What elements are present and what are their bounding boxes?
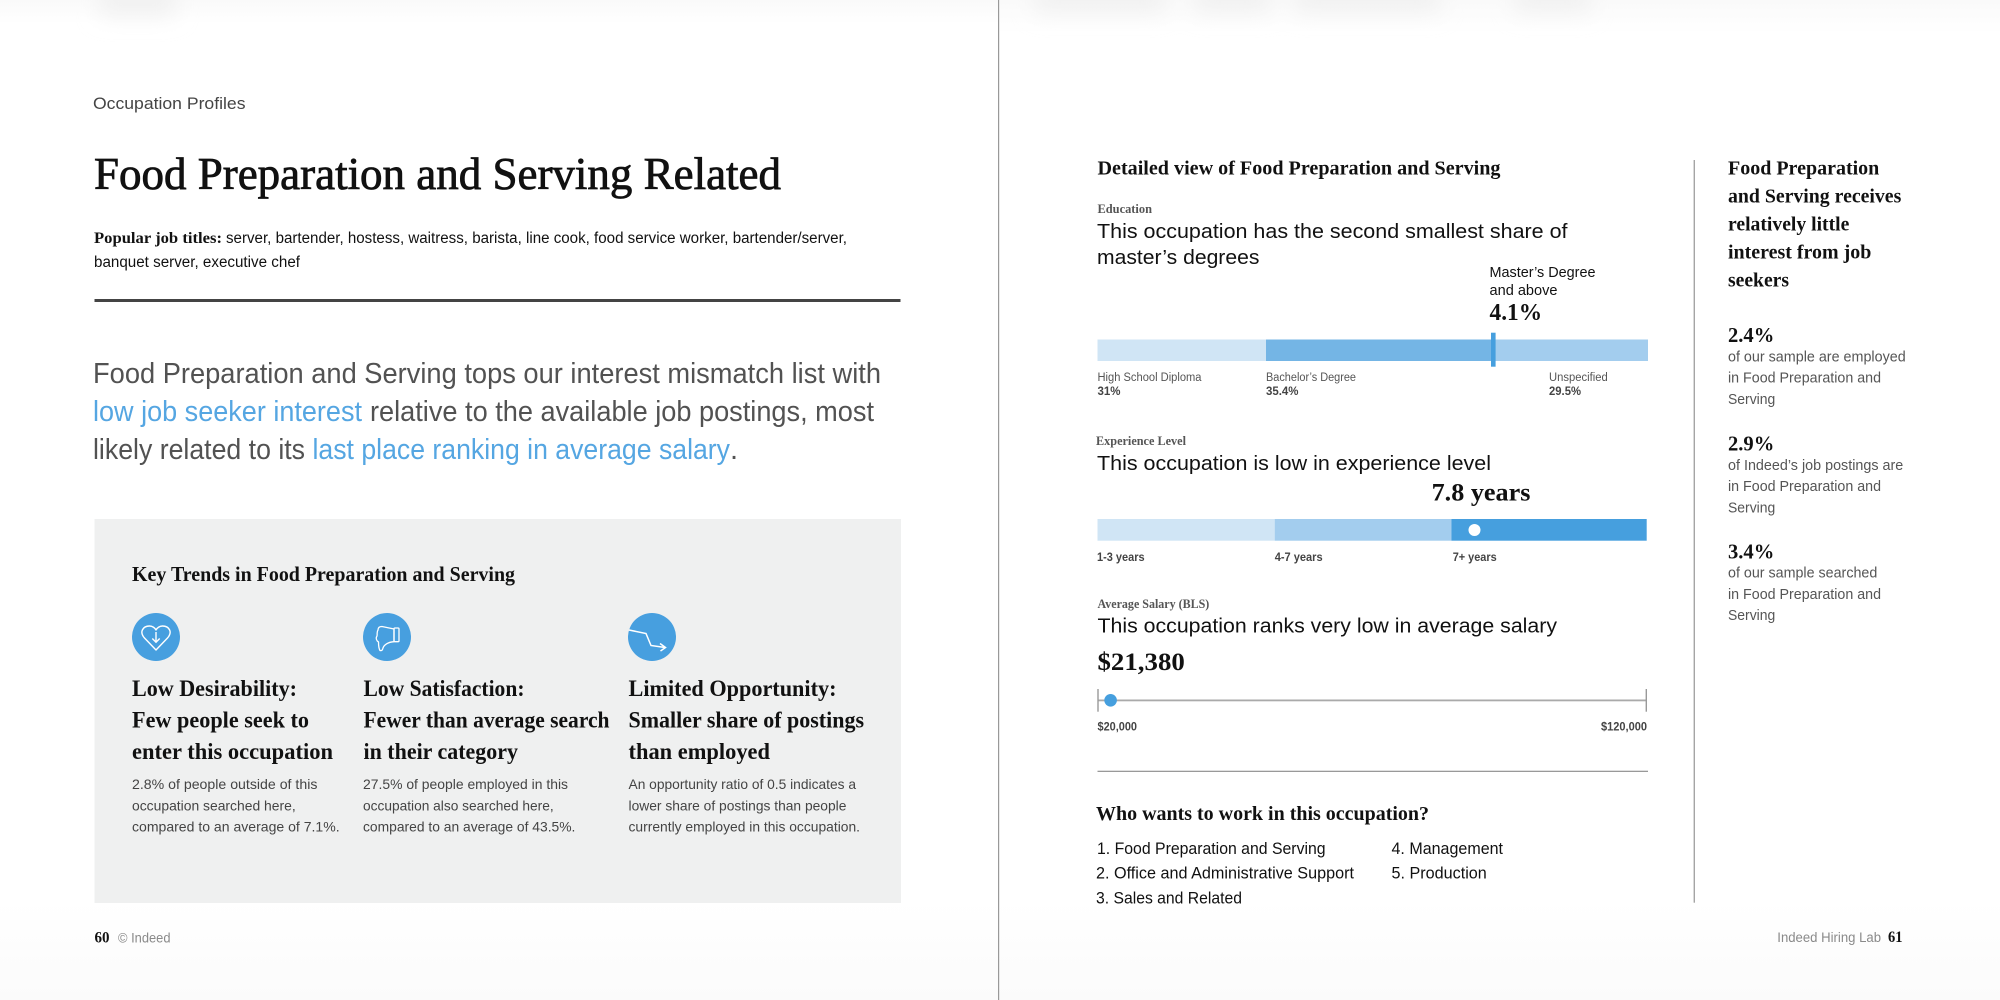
stat: 3.4% searched bbox=[1728, 539, 1881, 624]
stat: 3.4% searched: of our sample searched bbox=[1728, 566, 1877, 582]
heading: detailed view: Detailed view of Food Preparation and Serving bbox=[1098, 158, 1500, 180]
trend: low satisfaction: occupation also searched here, bbox=[363, 798, 554, 814]
trend: limited opportunity: Smaller share of postings bbox=[628, 708, 864, 734]
footer left bbox=[94, 930, 170, 946]
trend: low satisfaction: 27.5% of people employed in this bbox=[363, 776, 568, 792]
stat: 2.4% employed: 2.4% bbox=[1728, 323, 1774, 347]
experience bar labels: 1-3 years bbox=[1097, 552, 1145, 564]
education label: Education bbox=[1098, 201, 1153, 216]
stat: 2.9% job postings: 2.9% bbox=[1728, 432, 1774, 456]
stat: 3.4% searched: in Food Preparation and bbox=[1728, 587, 1881, 603]
callout: master's degree 4.1%: and above bbox=[1490, 282, 1558, 299]
trend: low desirability: enter this occupation bbox=[132, 739, 333, 765]
intro statement: relative to the available job postings, most bbox=[370, 396, 874, 428]
salary statement: This occupation ranks very low in average salary bbox=[1098, 615, 1558, 638]
trend: low desirability: 2.8% of people outside of this bbox=[132, 776, 317, 792]
education bar labels: 35.4% bbox=[1266, 386, 1298, 398]
education bar labels bbox=[1098, 372, 1608, 398]
trend: low desirability: compared to an average of 7.1%. bbox=[132, 818, 340, 834]
education bar labels: Bachelor’s Degree bbox=[1266, 372, 1356, 384]
intro statement: low job seeker interest bbox=[93, 396, 362, 428]
sidebar heading: interest from job bbox=[1728, 241, 1871, 263]
salary range scale bbox=[1097, 689, 1647, 712]
trend: limited opportunity bbox=[628, 676, 864, 834]
ranked occupation list: 2. Office and Administrative Support bbox=[1096, 865, 1354, 883]
footer left: © Indeed bbox=[118, 930, 170, 946]
scale labels: $20,000 bbox=[1098, 722, 1137, 734]
ranked occupation list bbox=[1096, 840, 1503, 907]
scale labels: $120,000 bbox=[1601, 722, 1647, 734]
education stacked bar bbox=[1098, 333, 1648, 367]
trend: low satisfaction: compared to an average of 43.5%. bbox=[363, 818, 575, 834]
sidebar heading: and Serving receives bbox=[1728, 185, 1902, 207]
trend: limited opportunity: than employed bbox=[628, 739, 770, 765]
trend: low desirability: occupation searched here, bbox=[132, 798, 296, 814]
intro statement: likely related to its bbox=[93, 434, 305, 466]
intro statement bbox=[93, 358, 881, 466]
stat: 2.4% employed: of our sample are employed bbox=[1728, 349, 1906, 365]
sidebar heading: seekers bbox=[1728, 269, 1789, 291]
footer left: 60 bbox=[94, 930, 110, 946]
stat: 2.4% employed: in Food Preparation and bbox=[1728, 370, 1881, 386]
stat: 3.4% searched: 3.4% bbox=[1728, 539, 1774, 563]
trend: low desirability: Few people seek to bbox=[132, 708, 309, 734]
footer right: Indeed Hiring Lab bbox=[1777, 930, 1881, 945]
education bar labels: 31% bbox=[1098, 386, 1120, 398]
section: education bbox=[1097, 201, 1648, 398]
experience label: Experience Level bbox=[1096, 433, 1186, 448]
stat: 3.4% searched: Serving bbox=[1728, 608, 1775, 624]
stat: 2.9% job postings: Serving bbox=[1728, 500, 1775, 516]
ranked occupation list: 5. Production bbox=[1392, 865, 1487, 883]
thin divider rule bbox=[1098, 771, 1648, 772]
popular job titles text: Popular job titles: bbox=[94, 230, 222, 247]
education statement: master’s degrees bbox=[1097, 246, 1259, 269]
icon: heart with down arrow bbox=[132, 613, 180, 661]
education bar labels: High School Diploma bbox=[1098, 372, 1202, 384]
trend: low desirability bbox=[132, 676, 340, 834]
footer right: 61 bbox=[1888, 929, 1902, 946]
trend: low desirability: Low Desirability: bbox=[132, 676, 297, 702]
experience bar labels: 7+ years bbox=[1453, 552, 1497, 564]
ranked occupation list: 3. Sales and Related bbox=[1096, 889, 1242, 907]
education statement bbox=[1097, 220, 1568, 269]
sidebar heading: Food Preparation bbox=[1728, 158, 1879, 180]
section: experience level bbox=[1096, 433, 1647, 564]
intro statement: Food Preparation and Serving tops our interest mismatch list with bbox=[93, 358, 881, 390]
trend: low satisfaction: Fewer than average search bbox=[364, 708, 610, 734]
trend: limited opportunity: currently employed in this occupation. bbox=[628, 818, 860, 834]
stat: 2.9% job postings bbox=[1728, 432, 1903, 516]
title: Food Preparation and Serving Related bbox=[94, 149, 781, 199]
experience bar labels: 4-7 years bbox=[1275, 552, 1323, 564]
intro statement: last place ranking in average salary bbox=[312, 434, 730, 466]
callout: 7.8 years: 7.8 years bbox=[1432, 480, 1531, 507]
sidebar heading bbox=[1728, 158, 1902, 291]
popular job titles text bbox=[94, 230, 847, 271]
experience bar labels bbox=[1097, 552, 1497, 564]
education bar labels: Unspecified bbox=[1549, 372, 1608, 384]
trend: limited opportunity: An opportunity ratio of 0.5 indicates a bbox=[628, 776, 856, 792]
icon: thumbs down bbox=[363, 613, 411, 661]
sidebar heading: relatively little bbox=[1728, 213, 1849, 235]
ranked occupation list: 1. Food Preparation and Serving bbox=[1097, 840, 1326, 858]
salary label: Average Salary (BLS) bbox=[1098, 596, 1209, 611]
panel: key trends bbox=[94, 519, 901, 903]
popular job titles text: banquet server, executive chef bbox=[94, 254, 301, 271]
ranked occupation list: 4. Management bbox=[1392, 840, 1503, 858]
education statement: This occupation has the second smallest share of bbox=[1097, 220, 1568, 243]
stat: 2.9% job postings: in Food Preparation and bbox=[1728, 479, 1881, 495]
section: average salary bbox=[1097, 596, 1647, 734]
trend: low satisfaction bbox=[363, 676, 610, 834]
trend: limited opportunity: Limited Opportunity: bbox=[628, 676, 836, 702]
stat: 2.4% employed bbox=[1728, 323, 1906, 408]
heading: who wants to work: Who wants to work in this occupation? bbox=[1096, 803, 1429, 825]
callout: master's degree 4.1% bbox=[1490, 264, 1596, 326]
trend: low satisfaction: in their category bbox=[364, 739, 518, 765]
sidebar rule bbox=[1694, 160, 1695, 903]
experience segmented bar bbox=[1098, 519, 1647, 541]
scale labels bbox=[1098, 722, 1647, 734]
popular job titles text: server, bartender, hostess, waitress, barista, line cook, food service worker, bartender/server, bbox=[226, 230, 847, 247]
intro statement: . bbox=[730, 434, 738, 466]
stat: 2.4% employed: Serving bbox=[1728, 392, 1775, 408]
panel heading: Key Trends in Food Preparation and Serving bbox=[132, 562, 515, 586]
callout: salary value: $21,380 bbox=[1098, 649, 1185, 676]
trend: limited opportunity: lower share of postings than people bbox=[628, 798, 847, 814]
callout: master's degree 4.1%: Master’s Degree bbox=[1490, 264, 1596, 281]
experience statement: This occupation is low in experience level bbox=[1097, 452, 1491, 475]
education bar labels: 29.5% bbox=[1549, 386, 1581, 398]
callout: master's degree 4.1%: 4.1% bbox=[1490, 300, 1542, 326]
stat: 2.9% job postings: of Indeed’s job postings are bbox=[1728, 458, 1903, 474]
heavy divider rule bbox=[94, 299, 900, 302]
icon: falling trend arrow bbox=[628, 613, 676, 661]
section label: Occupation Profiles: Occupation Profiles bbox=[93, 95, 246, 113]
trend: low satisfaction: Low Satisfaction: bbox=[364, 676, 524, 702]
